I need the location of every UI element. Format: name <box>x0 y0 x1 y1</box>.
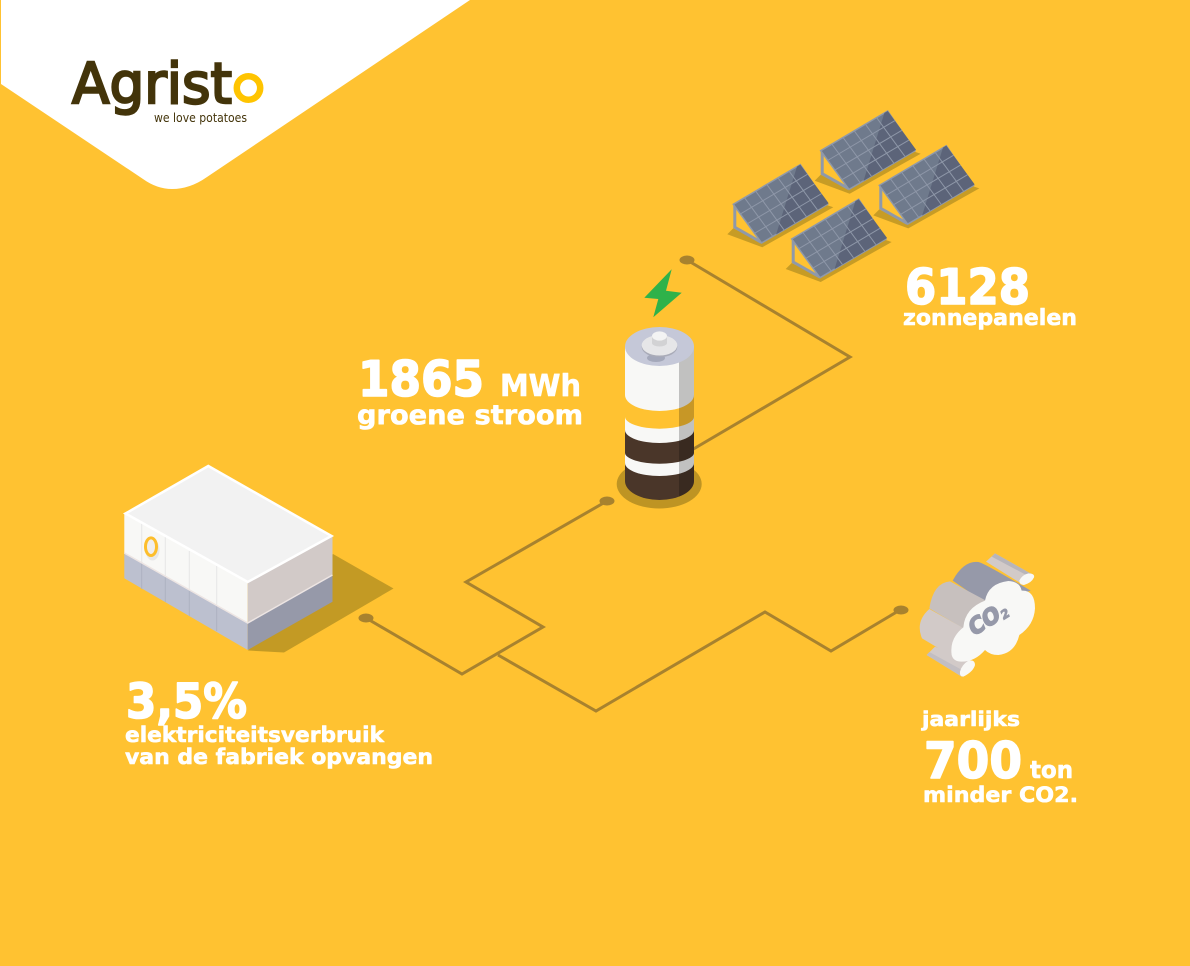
text: 3,5% elektriciteitsverbruik: elektriciteitsverbruik <box>125 723 385 747</box>
text: 1865 MWh groene stroom: groene stroom <box>357 400 583 431</box>
text: 1865 MWh groene stroom: 1865 <box>358 351 484 408</box>
icon: lightning bolt <box>644 269 682 317</box>
text: jaarlijks 700 ton minder CO2: ton <box>1030 756 1073 784</box>
text: 1865 MWh groene stroom <box>357 351 583 431</box>
logo <box>72 52 260 125</box>
text: jaarlijks 700 ton minder CO2: jaarlijks <box>921 707 1020 731</box>
text: jaarlijks 700 ton minder CO2: minder CO2. <box>923 783 1078 807</box>
cloud front <box>951 581 1035 662</box>
solar panels <box>727 111 979 282</box>
cloud label: CO <box>965 600 1004 642</box>
text: 3,5% elektriciteitsverbruik: van de fabriek opvangen <box>125 745 433 769</box>
connector line: battery to building <box>358 496 614 674</box>
solar panel: front <box>786 199 892 282</box>
cloud bottom bar <box>927 647 975 677</box>
building lower seam lines <box>142 562 217 631</box>
text: 6128 zonnepanelen <box>903 259 1077 331</box>
cloud label: 2 <box>999 605 1011 623</box>
building left face lower <box>124 552 248 650</box>
building roof <box>126 466 332 582</box>
building left face upper <box>124 513 248 623</box>
battery body <box>625 346 694 502</box>
text: jaarlijks 700 ton minder CO2 <box>921 707 1078 807</box>
battery terminal <box>642 331 677 362</box>
cloud top bar <box>986 553 1034 585</box>
text: 3,5% elektriciteitsverbruik <box>125 674 433 769</box>
building shadow <box>248 554 394 652</box>
solar panel: left <box>727 165 833 247</box>
logo tagline: we love potatoes <box>154 111 247 125</box>
logo wordmark: Agrist <box>72 52 232 117</box>
building <box>124 466 394 652</box>
logo letter o <box>237 76 260 100</box>
building right face upper <box>248 536 332 623</box>
connector line: panels to battery <box>680 256 850 451</box>
text: 1865 MWh groene stroom: MWh <box>500 369 581 404</box>
text: 3,5% elektriciteitsverbruik: 3,5% <box>126 674 247 730</box>
white corner shape <box>1 0 470 189</box>
building divider <box>124 553 332 623</box>
solar panel: right <box>873 146 979 228</box>
text: 6128 zonnepanelen: 6128 <box>905 259 1030 316</box>
text: 6128 zonnepanelen: zonnepanelen <box>903 306 1077 331</box>
connector line: to CO2 cloud <box>498 606 908 711</box>
battery top <box>625 327 694 366</box>
cloud back lower <box>920 609 963 657</box>
building logo ring <box>146 538 160 560</box>
building seam lines <box>142 523 217 605</box>
cloud back middle <box>929 581 986 628</box>
building right face lower <box>248 575 332 650</box>
icon: CO2 cloud <box>920 553 1035 677</box>
text: jaarlijks 700 ton minder CO2: 700 <box>924 732 1022 790</box>
battery base shadow <box>617 460 702 508</box>
solar panel: top <box>815 111 921 194</box>
battery <box>617 327 702 508</box>
cloud back top <box>953 562 1031 602</box>
